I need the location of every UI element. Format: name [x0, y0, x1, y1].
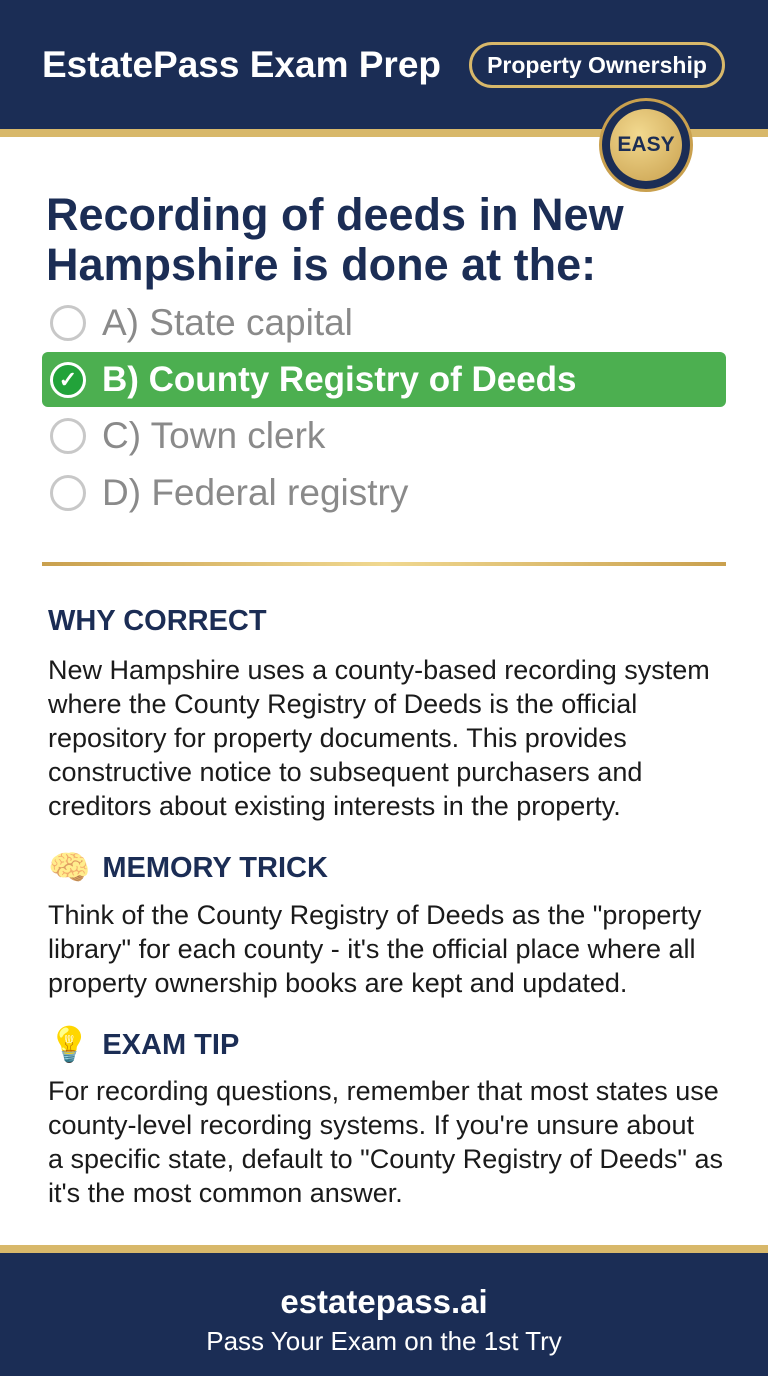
exam tip text: [48, 1076, 723, 1208]
footer tagline: Pass Your Exam on the 1st Try: [206, 1326, 562, 1356]
option B correct: [42, 352, 726, 407]
brand title: EstatePass Exam Prep: [42, 44, 441, 85]
memory trick heading: MEMORY TRICK: [102, 852, 328, 884]
memory trick text: [48, 900, 702, 998]
why correct heading: WHY CORRECT: [48, 605, 267, 637]
badge: easy: EASY: [617, 133, 675, 156]
why correct text: New Hampshire uses a county-based recording system: [48, 655, 710, 685]
why correct text: where the County Registry of Deeds is the official: [48, 689, 637, 719]
memory trick text: Think of the County Registry of Deeds as the "property: [48, 900, 701, 930]
memory trick text: library" for each county - it's the official place where all: [48, 934, 696, 964]
exam tip text: For recording questions, remember that most states use: [48, 1076, 719, 1106]
question: Hampshire is done at the:: [46, 239, 596, 290]
option B correct: ✓: [59, 366, 77, 392]
header: [0, 0, 768, 137]
why correct text: [48, 655, 710, 821]
option D: D) Federal registry: [102, 472, 408, 513]
footer url: estatepass.ai: [280, 1283, 488, 1320]
memory trick heading: 🧠: [48, 849, 90, 887]
category pill: [469, 42, 725, 88]
why correct text: constructive notice to subsequent purchasers and: [48, 757, 642, 787]
option A: A) State capital: [102, 302, 353, 343]
exam tip text: a specific state, default to "County Registry of Deeds" as: [48, 1144, 723, 1174]
exam tip text: county-level recording systems. If you're unsure about: [48, 1110, 694, 1140]
why correct text: creditors about existing interests in the property.: [48, 791, 621, 821]
question: [46, 189, 624, 290]
memory trick text: property ownership books are kept and updated.: [48, 968, 627, 998]
exam tip heading: EXAM TIP: [102, 1028, 239, 1060]
question: Recording of deeds in New: [46, 189, 624, 240]
footer: [0, 1245, 768, 1376]
exam tip text: it's the most common answer.: [48, 1178, 403, 1208]
why correct text: repository for property documents. This provides: [48, 723, 627, 753]
category pill: Property Ownership: [487, 52, 707, 78]
badge: easy: [599, 98, 693, 192]
option C: C) Town clerk: [102, 415, 325, 456]
exam tip heading: 💡: [48, 1026, 90, 1064]
exam tip heading: [48, 1026, 239, 1064]
memory trick heading: [48, 849, 328, 887]
option B correct: B) County Registry of Deeds: [102, 360, 576, 398]
